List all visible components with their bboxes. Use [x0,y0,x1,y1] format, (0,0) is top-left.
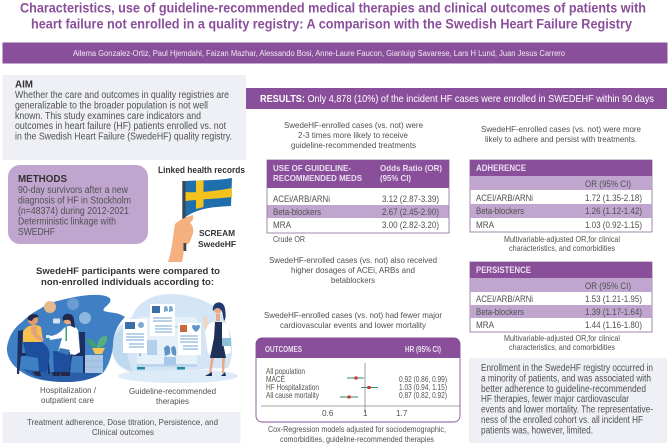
chart: outcomes forest plot: All cause mortality [266,391,320,400]
table: use of guideline-recommended meds: Odds Ratio (OR) [380,163,442,173]
caption: hospitalization: Hospitalization / [40,385,97,395]
table: adherence [470,160,652,232]
table: use of guideline-recommended meds: 2.67 (2.45-2.90) [382,207,439,217]
note: persistence adjustment [504,334,620,352]
table: adherence: ADHERENCE [476,163,526,173]
caption: therapies [129,386,216,406]
table: persistence: PERSISTENCE [476,265,531,275]
panel: aim: generalizable to the broader population is not well [15,100,208,112]
chart: outcomes forest plot: HF Hospitalization [266,383,319,392]
title [20,0,646,32]
results banner [246,88,667,109]
table: persistence: 1.53 (1.21-1.95) [585,294,642,304]
caption: hospitalization [40,385,97,405]
table: persistence: 1.44 (1.16-1.80) [585,320,642,330]
chart: outcomes forest plot: HR (95% CI) [405,345,441,354]
SCREAM SwedeHF label: SwedeHF [198,239,236,249]
panel: methods: (n=48374) during 2012-2021 [18,206,129,217]
authors band [2,42,668,64]
chart: outcomes forest plot: 0.92 (0.86, 0.99) [399,375,447,384]
text: higher dosages: higher dosages of ACEi, ARBs and [291,265,415,275]
panel: conclusion: HF therapies, fewer major cardiovascular [481,394,630,405]
text: adhere and persist [481,124,641,144]
SCREAM SwedeHF label [198,228,236,249]
note: persistence adjustment: Multivariable-adjusted OR,for clinical [504,334,620,343]
panel: methods [8,165,148,244]
caption: therapies: Guideline-recommended [129,386,216,396]
table: persistence: ACEI/ARB/ARNi [476,294,533,304]
title: heart failure not enrolled in a quality registry: A comparison with the Swedish Heart Failure Registry [31,16,632,32]
note: Cox regression [268,424,446,444]
text: higher dosages: SwedeHF-enrolled cases (vs. not) also received [269,255,437,265]
panel: aim: Whether the care and outcomes in quality registries are [15,90,229,101]
panel: methods: SWEDHF [18,227,55,238]
chart: outcomes forest plot: 0.87 (0.82, 0.92) [399,391,447,400]
table: use of guideline-recommended meds: 3.00 (2.82-3.20) [382,220,439,230]
text: higher dosages [269,255,437,285]
panel: aim: AIM [15,80,33,90]
authors band: Ailema Gonzalez-Ortiz, Paul Hjemdahl, Faizan Mazhar, Alessando Bosi, Anne-Laure Faucon, Gianluigi Savarese, Lars H Lund, Juan Jesus Carrero [73,49,566,58]
chart: outcomes forest plot: OUTCOMES [265,345,303,354]
panel: bottom-left outcomes list: Clinical outcomes [92,427,154,437]
chart: outcomes forest plot: 1 [363,409,368,418]
panel: aim: known. This study examines care indicators and [15,111,201,122]
panel: conclusion: better adherence to guideline-recommended [481,384,646,395]
linked health records heading: Linked health records [158,165,245,175]
table: use of guideline-recommended meds [267,160,449,233]
panel: bottom-left outcomes list [2,412,240,443]
table: persistence: 1.39 (1.17-1.64) [585,307,642,317]
panel: methods: diagnosis of HF in Stockholm [18,196,131,206]
table: use of guideline-recommended meds: (95% CI) [380,173,411,183]
icon: hand holding Swedish flag [168,178,232,262]
table: use of guideline-recommended meds: 3.12 (2.87-3.39) [382,194,439,204]
text: more likely to receive treatments: 2-3 times more likely to receive [298,130,408,140]
text: more likely to receive treatments: guideline-recommended treatments [291,140,416,150]
text: more likely to receive treatments: SwedeHF-enrolled cases (vs. not) were [284,120,423,130]
table: use of guideline-recommended meds: USE OF GUIDELINE- [273,163,351,173]
SCREAM SwedeHF label: SCREAM [199,228,235,238]
table: adherence: 1.03 (0.92-1.15) [585,220,642,230]
table: use of guideline-recommended meds: Beta-blockers [273,207,321,217]
table: adherence: 1.26 (1.12-1.42) [585,206,642,216]
panel: methods: Deterministic linkage with [18,216,116,228]
table: use of guideline-recommended meds: ACEi/ARB/ARNi [273,194,330,204]
text: fewer cardiovascular events: SwedeHF-enrolled cases (vs. not) had fewer major [264,310,442,320]
chart: outcomes forest plot: MACE [266,375,285,384]
comparison heading: SwedeHF participants were compared to [36,266,220,277]
note: adherence adjustment: characteristics, and comorbidities [509,244,615,253]
panel: conclusion [469,358,667,443]
chart: outcomes forest plot [256,338,460,422]
table: adherence: ACEI/ARB/ARNi [476,193,533,203]
comparison heading: non-enrolled individuals according to: [41,277,214,288]
text: higher dosages: betablockers [331,275,375,285]
table: persistence: MRA [476,320,495,330]
panel: methods: METHODS [18,174,67,185]
text: adhere and persist: SwedeHF-enrolled cases (vs. not) were more [481,124,641,134]
table: adherence: Beta-blockers [476,206,524,216]
text: fewer cardiovascular events: cardiovascular events and lower mortality [280,320,427,330]
table: persistence: Beta-blockers [476,307,524,317]
caption: hospitalization: outpatient care [41,395,94,405]
text: more likely to receive treatments [284,120,423,150]
chart: outcomes forest plot: 1.03 (0.94, 1.15) [399,383,447,392]
chart: outcomes forest plot: All population [266,367,305,376]
text: adhere and persist: likely to adhere and persist with treatments. [485,134,637,144]
table: persistence [470,262,652,332]
text: fewer cardiovascular events [264,310,442,330]
caption: therapies: therapies [156,396,189,406]
table: use of guideline-recommended meds: RECOMMENDED MEDS [273,173,362,183]
panel: aim: in the Swedish Heart Failure (SwedeHF) quality registry. [15,132,232,142]
note: persistence adjustment: characteristics, and comorbidities [509,343,615,352]
note: Cox regression: Cox-Regression models adjusted for sociodemographic, [268,424,446,434]
note: adherence adjustment [504,235,620,253]
note: Cox regression: comorbidities, guideline-recommended therapies [280,434,434,444]
table: use of guideline-recommended meds: MRA [273,220,292,230]
panel: methods: 90-day survivors after a new [18,185,129,196]
comparison heading [36,266,220,288]
panel: conclusion: patients was, however, limited. [481,426,593,436]
panel: aim [2,75,246,160]
panel: aim: outcomes in heart failure (HF) patients enrolled vs. not [15,121,226,132]
note: crude OR: Crude OR [273,235,305,244]
chart: outcomes forest plot: 0.6 [322,409,334,418]
table: adherence: 1.72 (1.35-2.18) [585,193,642,203]
table: persistence: OR (95% CI) [585,281,631,291]
chart: outcomes forest plot: 1.7 [396,409,408,418]
table: adherence: OR (95% CI) [585,179,631,189]
table: adherence: MRA [476,220,495,230]
illustration: guideline-recommended therapy records [112,294,238,383]
panel: bottom-left outcomes list: Treatment adherence, Dose titration, Persistence, and [27,417,218,427]
note: adherence adjustment: Multivariable-adjusted OR,for clinical [504,235,620,244]
illustration: patient and doctor consultation [7,295,125,382]
